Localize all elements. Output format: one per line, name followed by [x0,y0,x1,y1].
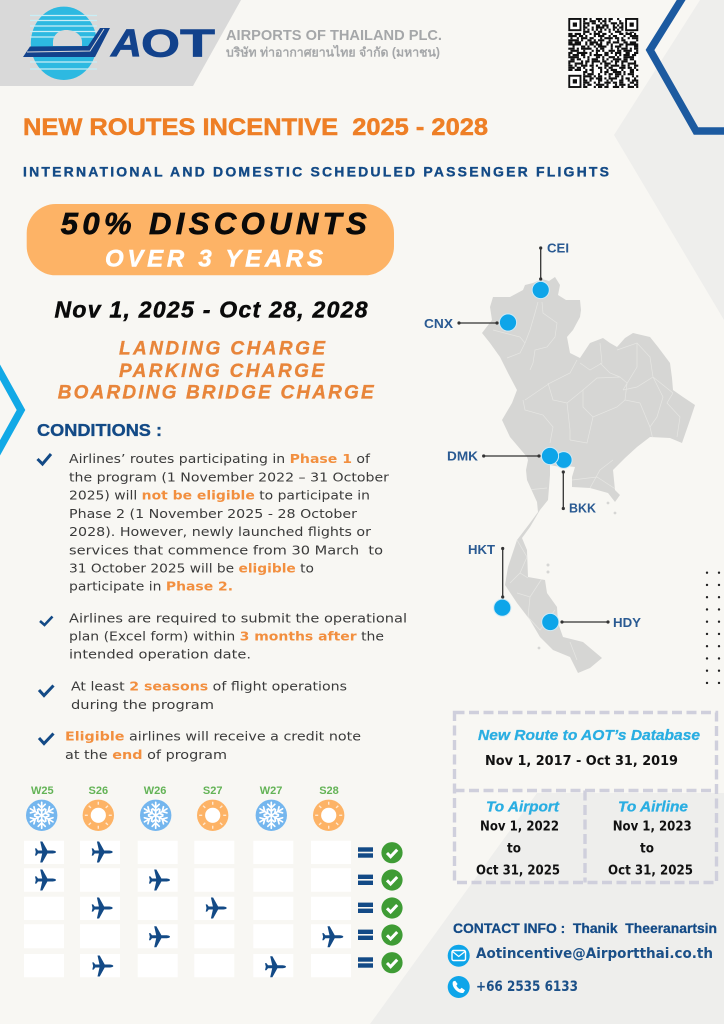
condition 3: At least 2 seasons of flight operations [71,680,347,694]
airport marker: HDY: HDY [613,615,641,630]
contact info: CONTACT INFO : Thanik Theeranartsin [453,921,717,936]
condition 1: the program (1 November 2022 – 31 October [69,470,389,484]
QR code [568,18,638,88]
condition 1 [38,452,389,594]
condition 1: 2028). However, newly launched flights or [69,525,371,539]
condition 1: 31 October 2025 will be eligible to [69,562,314,576]
airport marker: HKT: HKT [468,542,495,557]
airport marker: DMK: DMK [447,448,479,464]
condition 1: Airlines’ routes participating in Phase 1 of [69,452,371,466]
map of Thailand [482,277,695,673]
airport marker: HDY [542,613,641,631]
timeline boxes: To Airline [618,798,688,815]
condition 4: Eligible airlines will receive a credit note [65,730,361,744]
season labels and icons [26,785,344,831]
condition 2: intended operation date. [69,648,251,662]
logo: AOT: O [141,22,180,66]
season labels and icons: S26 [89,785,108,797]
timeline boxes: To Airport [486,798,560,815]
discount pill [27,204,394,275]
program dates: Nov 1, 2025 - Oct 28, 2028 [54,296,368,322]
email: Aotincentive@Airportthai.co.th [476,946,713,962]
season labels and icons: W27 [260,785,282,797]
timeline boxes: Nov 1, 2022 [480,819,559,835]
condition 4: at the end of program [65,748,227,762]
condition 4 [39,730,361,762]
condition 1: 2025) will not be eligible to participate in [69,489,370,503]
season grid cells [24,841,351,977]
equals and check results [358,842,403,973]
airport marker: BKK [555,452,597,516]
airport marker: CNX: CNX [424,316,453,331]
condition 1: Phase 2 (1 November 2025 - 28 October [69,507,357,521]
plane icons [35,842,343,977]
condition 3 [39,680,347,712]
charges list: PARKING CHARGE [119,361,325,382]
timeline boxes: Oct 31, 2025 [476,862,560,878]
timeline boxes: Nov 1, 2017 - Oct 31, 2019 [485,753,678,769]
charges list [58,339,375,404]
season labels and icons: W25 [31,785,54,797]
timeline boxes: to [507,841,521,857]
timeline boxes: Oct 31, 2025 [608,862,693,878]
subtitle: INTERNATIONAL AND DOMESTIC SCHEDULED PASSENGER FLIGHTS [23,164,609,180]
condition 1: participate in Phase 2. [69,580,233,594]
timeline boxes: New Route to AOT’s Database [478,727,700,744]
charges list: BOARDING BRIDGE CHARGE [58,383,375,404]
airport marker: CNX [424,314,517,331]
phone [448,976,578,998]
timeline boxes [454,712,716,882]
condition 3: during the program [71,698,214,712]
season labels and icons: S27 [203,785,222,797]
condition 1: services that commence from 30 March to [69,543,383,557]
season labels and icons: W26 [144,785,166,797]
logo: AOT: A [110,22,142,66]
phone: +66 2535 6133 [476,979,578,995]
airport marker: DMK [447,447,559,465]
discount pill: 50% DISCOUNTS [61,206,367,241]
email [448,945,713,967]
company name: บริษัท ท่าอากาศยานไทย จำกัด (มหาชน) [226,44,440,60]
charges list: LANDING CHARGE [119,339,326,360]
condition 2: Airlines are required to submit the operational [69,611,407,625]
condition 2 [40,611,407,662]
logo: AOT: T [180,22,215,66]
discount pill: OVER 3 YEARS [105,245,323,272]
company name: AIRPORTS OF THAILAND PLC. [226,27,442,44]
airport marker: CEI [532,240,569,299]
airport marker: CEI: CEI [547,240,569,256]
airport marker: HKT [468,542,511,616]
airport marker: BKK: BKK [569,500,597,516]
company name [226,27,442,60]
logo: AOT [23,7,215,80]
timeline boxes: to [640,841,654,857]
timeline boxes: Nov 1, 2023 [613,819,692,835]
title: NEW ROUTES INCENTIVE 2025 - 2028 [23,114,488,141]
conditions heading: CONDITIONS : [37,420,162,440]
condition 2: plan (Excel form) within 3 months after the [69,630,384,644]
season labels and icons: S28 [319,785,339,797]
